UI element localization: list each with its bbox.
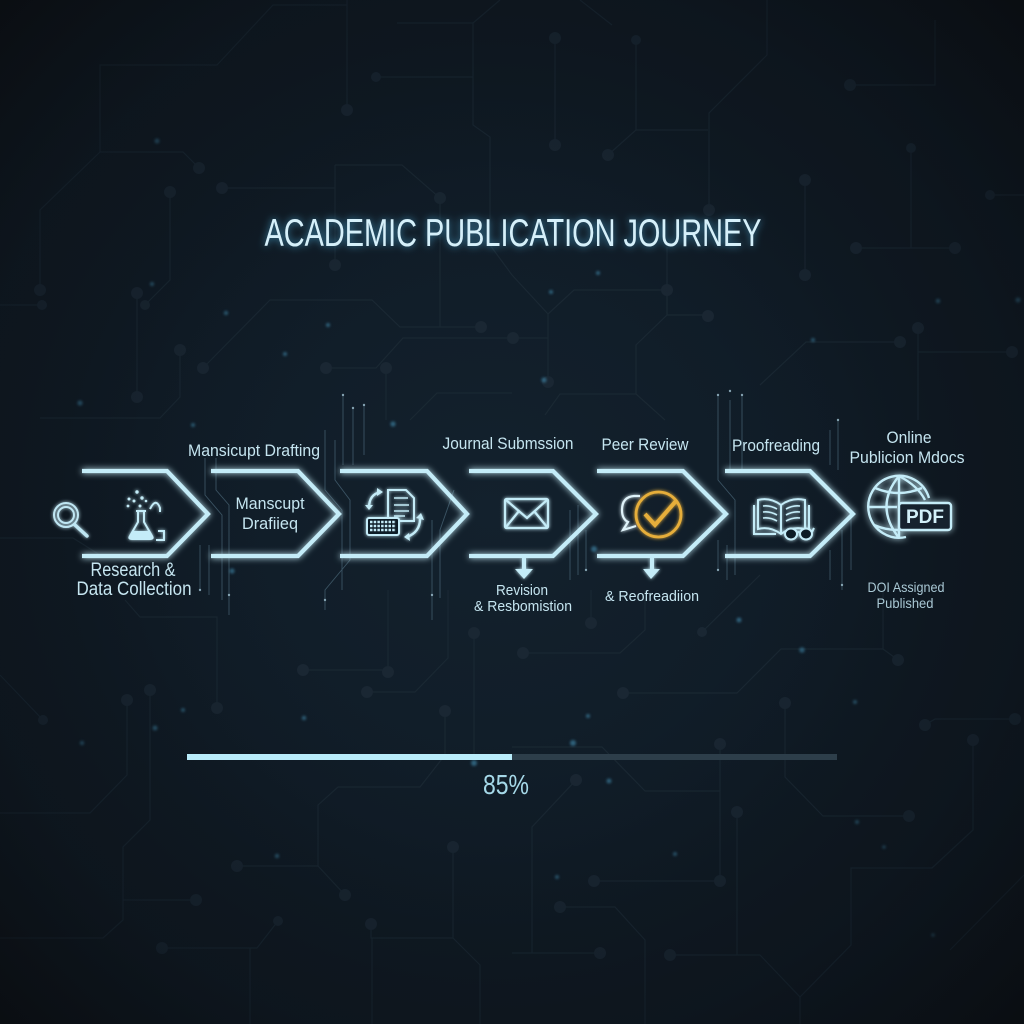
icon: document, keyboard and arrows	[365, 488, 424, 541]
label: DOI published: DOI Assigned	[868, 579, 944, 595]
label: online publication: Online	[886, 428, 932, 447]
chevron: journal submission	[469, 471, 596, 556]
icon: globe with PDF badge: PDF	[906, 507, 944, 528]
progress value: 85%	[483, 769, 529, 800]
label: DOI published: Published	[876, 595, 934, 611]
title: ACADEMIC PUBLICATION JOURNEY	[264, 212, 762, 255]
label: journal submission: Journal Submssion	[442, 435, 574, 453]
label: revision: & Resbomistion	[474, 598, 572, 615]
chevron: proofreading	[725, 471, 853, 556]
label: online publication: Publicion Mdocs	[850, 448, 964, 467]
label: manuscript drafting top: Mansicupt Drafting	[188, 441, 320, 460]
icon: speech bubble and check	[622, 492, 681, 537]
icon: envelope	[505, 499, 548, 528]
progress bar	[187, 754, 837, 760]
icon: globe with PDF badge	[868, 476, 951, 538]
label: research: Research &	[90, 560, 176, 581]
label: manuscript drafting inner: Drafiieq	[242, 514, 298, 533]
step labels	[76, 428, 964, 615]
label: manuscript drafting inner: Manscupt	[236, 494, 305, 513]
chevron: peer review	[597, 471, 726, 556]
label: research: Data Collection	[76, 579, 192, 600]
chevron: research	[82, 471, 208, 556]
icon: magnifier	[54, 503, 87, 536]
icon: open book and glasses	[754, 499, 814, 540]
chevron: manuscript drafting	[211, 471, 339, 556]
label: revision: Revision	[496, 582, 548, 599]
arrow: to proofreading	[643, 558, 660, 579]
chevron: revision of manuscript	[340, 471, 467, 556]
label: peer review: Peer Review	[602, 435, 689, 454]
label: proofreading: Proofreading	[732, 436, 820, 455]
label: reofreadiion: & Reofreadiion	[605, 588, 699, 605]
process chevrons	[82, 471, 853, 556]
icon: flask	[127, 490, 164, 540]
arrow: to revision	[515, 558, 533, 579]
